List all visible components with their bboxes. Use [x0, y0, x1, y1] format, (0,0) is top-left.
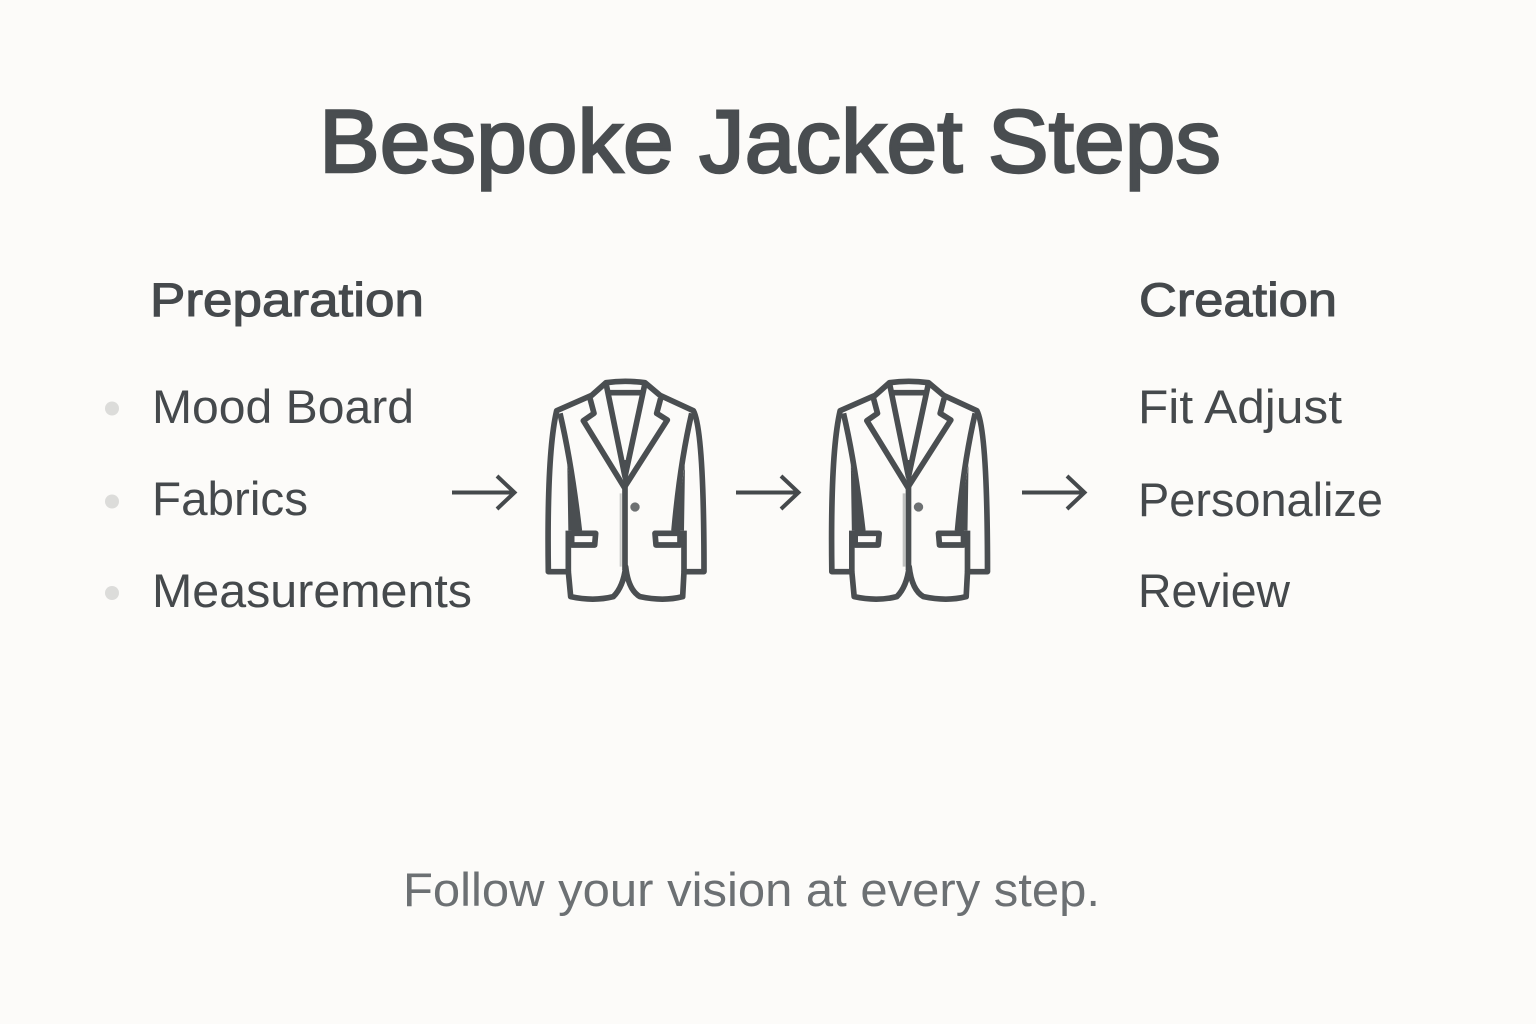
bullet: fabrics — [105, 494, 119, 508]
step: measurements: Measurements — [152, 564, 472, 617]
footer tagline: Follow your vision at every step. — [403, 863, 1100, 916]
step: fabrics: Fabrics — [152, 472, 308, 525]
arrow: preparation to first jacket — [452, 476, 514, 509]
arrow: second jacket to creation — [1022, 476, 1084, 509]
panel: preparation — [105, 273, 472, 617]
icon: first jacket — [548, 381, 704, 599]
bullet: measurements — [105, 586, 119, 600]
heading: creation: Creation — [1139, 273, 1337, 326]
step: mood board: Mood Board — [152, 380, 414, 433]
panel: creation — [1138, 273, 1383, 617]
step: personalize: Personalize — [1138, 473, 1383, 526]
arrow: first jacket to second jacket — [736, 476, 798, 509]
heading: preparation: Preparation — [150, 273, 424, 326]
icon: second jacket — [832, 381, 987, 599]
step: review: Review — [1138, 564, 1291, 617]
bullet: mood board — [105, 402, 119, 416]
step: fit adjust: Fit Adjust — [1138, 380, 1342, 433]
title: Bespoke Jacket Steps — [319, 91, 1221, 191]
